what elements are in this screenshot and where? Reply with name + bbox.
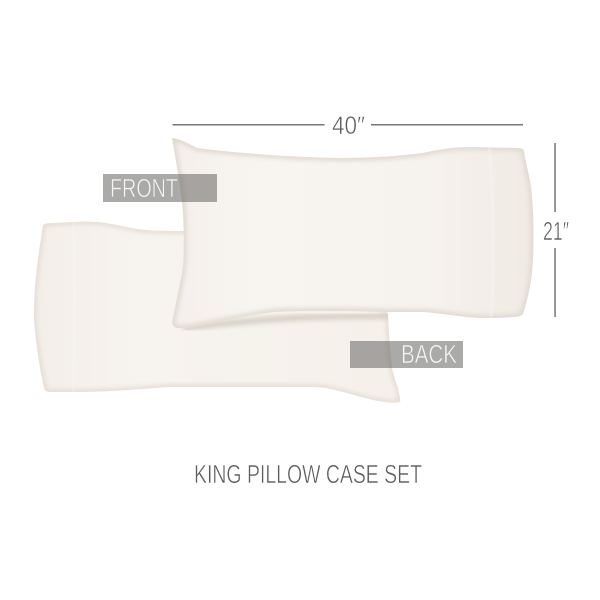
label: back (350, 339, 463, 369)
caption: KING PILLOW CASE SET (194, 459, 422, 489)
back pillow case (34, 222, 400, 403)
label: front: FRONT (110, 173, 178, 203)
label: back: BACK (401, 339, 458, 369)
front pillow case (172, 138, 534, 328)
dimension: height 21 inches: 21″ (543, 216, 569, 246)
infographic canvas (34, 116, 569, 484)
dimension: width 40 inches: 40″ (332, 112, 365, 140)
